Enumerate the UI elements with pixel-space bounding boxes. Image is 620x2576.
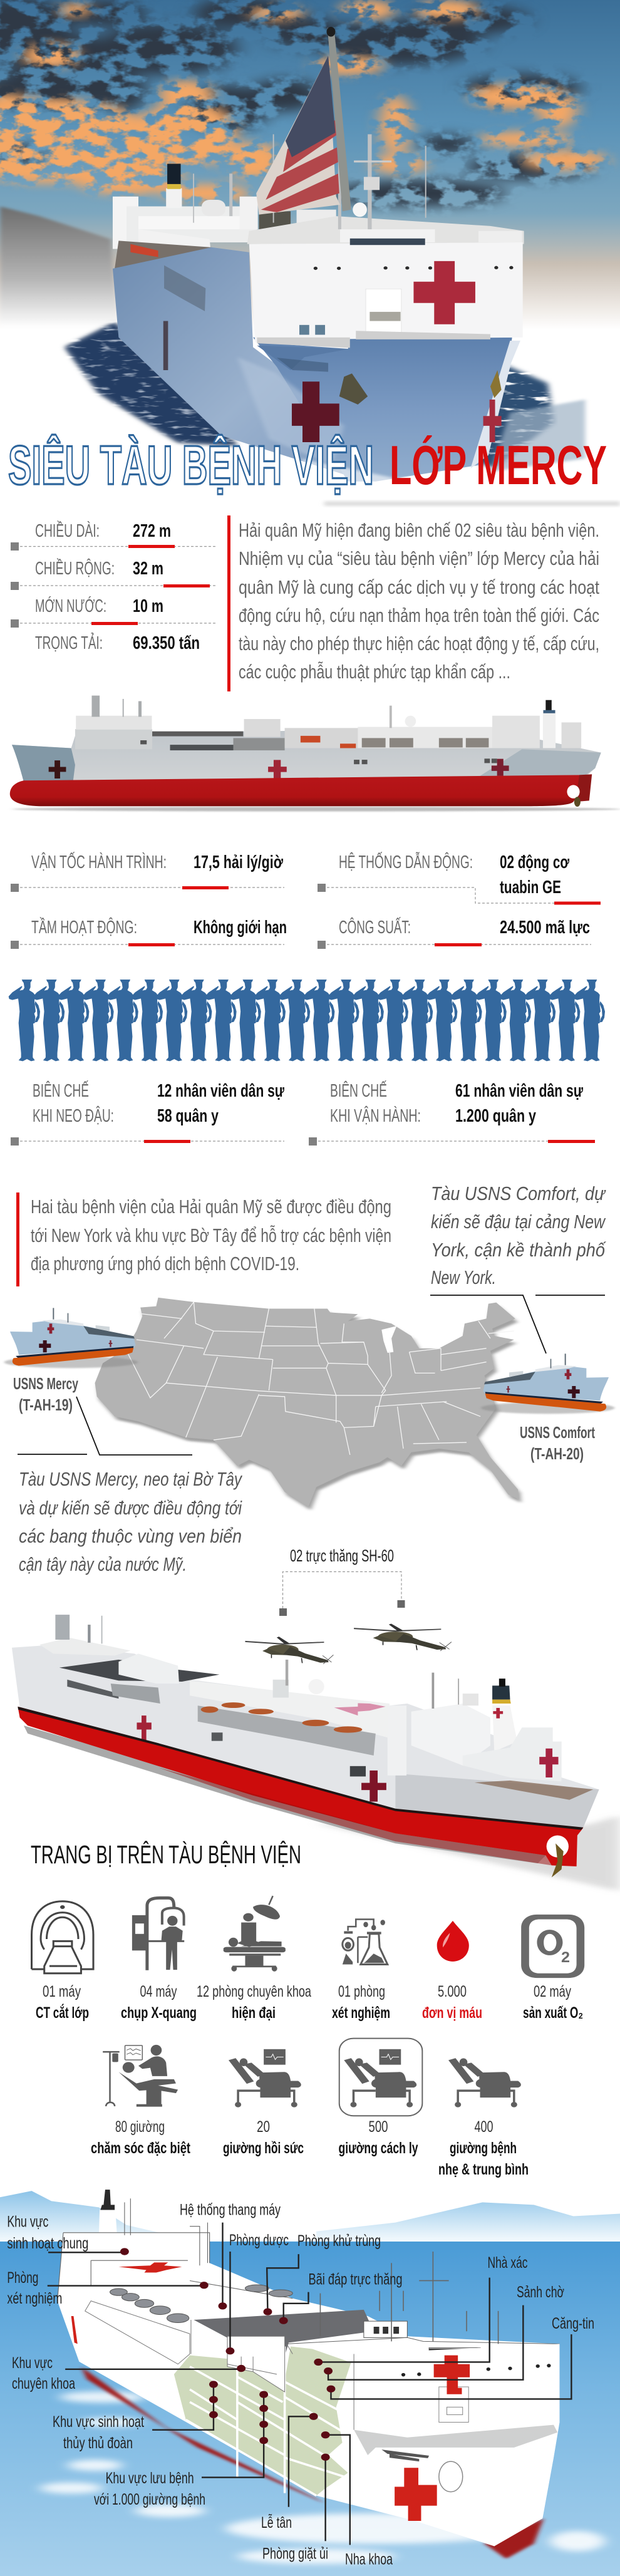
anchors — [339, 373, 368, 405]
equipment labels row 2: nhẹ & trung bình — [438, 2161, 529, 2178]
specs: speed, propulsion, range, power: 17,5 hải lý/giờ — [194, 852, 283, 872]
equipment labels row 1: 12 phòng chuyên khoa — [197, 1983, 311, 2000]
equipment labels row 1: sản xuất O₂ — [523, 2004, 583, 2022]
specs: speed, propulsion, range, power: tuabin GE — [500, 877, 561, 897]
specs: speed, propulsion, range, power: CÔNG SUẤT: — [339, 916, 411, 938]
equipment labels row 1: CT cắt lớp — [36, 2003, 89, 2022]
oxygen subscript: 2 — [561, 1949, 570, 1966]
helicopter left — [245, 1637, 333, 1664]
side cross — [71, 2316, 78, 2344]
red waterline — [81, 2367, 324, 2503]
specs: speed, propulsion, range, power: 24.500 mã lực — [500, 918, 590, 938]
equipment labels row 2: giường hồi sức — [223, 2139, 304, 2157]
cutaway labels: Căng-tin — [552, 2315, 594, 2332]
staffing figures — [11, 1080, 595, 1146]
staffing figures: KHI VẬN HÀNH: — [330, 1105, 421, 1126]
equipment labels row 2 — [91, 2118, 529, 2178]
staffing figures: BIÊN CHẾ — [330, 1080, 387, 1101]
bridge and masts — [364, 2321, 407, 2337]
equipment labels row 1: 01 máy — [43, 1983, 81, 2000]
cutaway ship diagram — [0, 2190, 620, 2576]
cutaway labels: Bãi đáp trực thăng — [308, 2271, 402, 2289]
cutaway labels: Nha khoa — [345, 2550, 393, 2568]
cutaway labels — [7, 2201, 594, 2568]
marker dots — [120, 2248, 335, 2461]
USNS Comfort italic note — [431, 1182, 606, 1288]
deployment paragraph: Hai tàu bệnh viện của Hải quân Mỹ sẽ được điều động — [31, 1196, 391, 1218]
equipment labels row 2: 500 — [368, 2118, 388, 2136]
leader line: Comfort — [430, 1295, 605, 1353]
ship dimensions list: TRỌNG TẢI: — [35, 632, 103, 653]
USNS Comfort label: (T-AH-20) — [530, 1444, 584, 1463]
USNS Mercy label: (T-AH-19) — [19, 1395, 73, 1414]
helipad deck — [194, 2310, 374, 2357]
ship dimensions list: MỚN NƯỚC: — [35, 596, 106, 616]
USNS Mercy italic note: các bang thuộc vùng ven biển — [19, 1525, 242, 1547]
equipment labels row 2: giường cách ly — [338, 2139, 418, 2157]
American flag — [256, 27, 351, 215]
cutaway labels: với 1.000 giường bệnh — [94, 2491, 205, 2508]
water around the ship — [65, 323, 237, 445]
cutaway labels: Khu vực lưu bệnh — [106, 2470, 194, 2487]
equipment labels row 1: xét nghiệm — [332, 2004, 390, 2022]
ship dimensions list: CHIỀU RỘNG: — [35, 557, 115, 579]
USNS Mercy label — [13, 1374, 78, 1414]
USNS Mercy italic note: cận tây này của nước Mỹ. — [19, 1553, 187, 1575]
staffing figures: 1.200 quân y — [455, 1106, 536, 1126]
equipment labels row 1: 5.000 — [438, 1983, 467, 2000]
staffing figures: 12 nhân viên dân sự — [157, 1081, 284, 1101]
cutaway labels: Phòng — [7, 2269, 38, 2287]
front white hull section — [336, 2344, 559, 2546]
USNS Comfort label — [520, 1423, 595, 1463]
specs: speed, propulsion, range, power: TẦM HOẠT ĐỘNG: — [31, 916, 137, 938]
foam — [39, 2391, 605, 2564]
icon: X-ray machine — [132, 1898, 184, 1970]
red cross on superstructure — [413, 261, 475, 324]
leader lines — [48, 2223, 571, 2545]
helicopter right — [354, 1623, 452, 1651]
USNS Mercy small ship — [4, 1308, 138, 1368]
intro paragraph — [227, 515, 599, 691]
specs: speed, propulsion, range, power: 02 động cơ — [500, 852, 569, 872]
cutaway labels: Phòng khử trùng — [297, 2232, 381, 2250]
portholes — [401, 2364, 551, 2376]
wake — [301, 458, 499, 504]
cutaway labels: sinh hoạt chung — [7, 2235, 88, 2252]
mountains — [0, 2191, 620, 2242]
equipment labels row 1: đơn vị máu — [422, 2004, 482, 2022]
equipment labels row 1 — [36, 1983, 583, 2022]
equipment labels row 2: 80 giường — [115, 2118, 165, 2136]
map of the United States — [95, 1298, 521, 1510]
front cross — [434, 2356, 470, 2394]
USNS Mercy italic note: và dự kiến sẽ được điều động tới — [19, 1497, 242, 1519]
cutaway labels: Khu vực sinh hoạt — [53, 2413, 144, 2431]
ship dimensions list: 69.350 tấn — [133, 633, 200, 653]
USNS Comfort small ship — [481, 1353, 614, 1414]
hull side — [113, 247, 356, 478]
clouds — [0, 0, 620, 506]
cutaway labels: Khu vực — [7, 2213, 48, 2231]
icon: intensive care — [103, 2045, 178, 2107]
equipment labels row 2: chăm sóc đặc biệt — [91, 2139, 190, 2157]
cutaway labels: thủy thủ đoàn — [63, 2434, 133, 2452]
green cutaway compartments — [174, 2346, 354, 2496]
large ship three-quarter view — [12, 1615, 620, 1891]
cutaway labels: Nhà xác — [487, 2254, 527, 2272]
icon: laboratory — [343, 1920, 388, 1965]
ship dimensions list: 32 m — [133, 559, 163, 579]
specs: speed, propulsion, range, power: VẬN TỐC HÀNH TRÌNH: — [31, 851, 167, 872]
distant hill — [0, 206, 118, 328]
staffing figures: KHI NEO ĐẬU: — [33, 1105, 114, 1126]
cutaway labels: Phòng giặt ủi — [262, 2545, 328, 2563]
equipment labels row 1: 02 máy — [534, 1983, 571, 2000]
cutaway labels: Phòng dược — [229, 2232, 289, 2249]
white forward superstructure — [249, 242, 523, 349]
ship dimensions list — [11, 520, 216, 653]
USNS Mercy label: USNS Mercy — [13, 1374, 78, 1393]
hero photo: hospital ship under sunset sky — [0, 0, 620, 507]
icon: isolation bed in rounded frame — [339, 2039, 422, 2116]
equipment labels row 1: 01 phòng — [338, 1983, 385, 2000]
helipad cross — [118, 2262, 182, 2273]
helicopter label: 02 trực thăng SH-60 — [290, 1546, 394, 1565]
cutaway labels: Lễ tân — [261, 2513, 292, 2532]
icon: general ward bed — [448, 2058, 521, 2108]
ship side superstructure — [113, 134, 524, 269]
specs: speed, propulsion, range, power: HỆ THỐNG DẪN ĐỘNG: — [339, 851, 473, 872]
deployment paragraph: địa phương ứng phó dịch bệnh COVID-19. — [31, 1253, 299, 1275]
specs: speed, propulsion, range, power: Không giới hạn — [194, 918, 287, 938]
ship dimensions list: 272 m — [133, 521, 171, 541]
helicopter label — [279, 1546, 405, 1616]
icon: CT scanner — [32, 1901, 93, 1973]
cutaway labels: Sảnh chờ — [517, 2284, 564, 2301]
cutaway labels: xét nghiệm — [7, 2290, 62, 2307]
section heading: equipment: TRANG BỊ TRÊN TÀU BỆNH VIỆN — [31, 1840, 301, 1869]
staffing figures: 58 quân y — [157, 1106, 219, 1126]
sea — [0, 2242, 620, 2576]
icon: blood drop — [437, 1921, 469, 1962]
hull bow — [253, 338, 512, 482]
ship dimensions list: CHIỀU DÀI: — [35, 520, 100, 541]
title: SIÊU TÀU BỆNH VIỆN — [8, 434, 374, 496]
sky background — [0, 0, 620, 507]
cutaway labels: Khu vực — [12, 2354, 53, 2372]
red cross on hull — [292, 381, 339, 442]
bow cross — [395, 2468, 437, 2521]
hull — [58, 2233, 559, 2546]
icon: operating room — [224, 1896, 286, 1972]
equipment labels row 2: 400 — [475, 2118, 493, 2136]
equipment labels row 1: hiện đại — [232, 2004, 276, 2022]
cutaway labels: Hệ thống thang máy — [180, 2201, 281, 2218]
ship side profile — [10, 696, 620, 812]
USNS Mercy italic note: Tàu USNS Mercy, neo tại Bờ Tây — [19, 1468, 243, 1490]
icon: oxygen O2 — [521, 1915, 584, 1978]
superstructure outline — [58, 2198, 292, 2301]
ship dimensions list: 10 m — [133, 596, 163, 616]
intro paragraph: các cuộc phẫu thuật phức tạp khẩn cấp ... — [239, 661, 510, 683]
funnel — [99, 2210, 117, 2237]
USNS Comfort italic note: New York. — [431, 1266, 496, 1288]
leader line: Mercy — [18, 1397, 192, 1455]
equipment labels row 1: 04 máy — [140, 1983, 177, 2000]
deployment paragraph — [16, 1192, 391, 1286]
USNS Mercy italic note — [19, 1468, 243, 1575]
equipment labels row 1: chụp X-quang — [121, 2004, 197, 2022]
staffing figures: BIÊN CHẾ — [33, 1080, 89, 1101]
icon: recovery bed — [229, 2049, 301, 2108]
equipment labels row 2: giường bệnh — [450, 2139, 517, 2157]
small cross at bow — [483, 400, 502, 442]
equipment labels row 2: 20 — [257, 2118, 270, 2136]
row of saluting crew silhouettes — [9, 980, 605, 1061]
specs: speed, propulsion, range, power — [11, 851, 601, 949]
cutaway labels: chuyên khoa — [12, 2375, 75, 2392]
deployment paragraph: tới New York và khu vực Bờ Tây để hỗ trợ các bệnh viện — [31, 1224, 391, 1246]
lifeboats — [110, 2285, 292, 2322]
